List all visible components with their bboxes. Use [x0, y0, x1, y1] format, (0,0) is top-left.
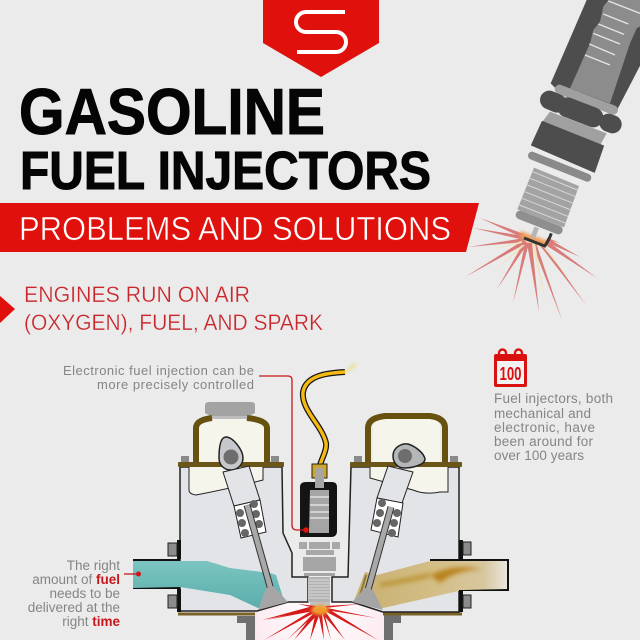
icon: spark plug with sparks — [465, 0, 640, 320]
callout line to spark plug — [259, 376, 309, 533]
right cylinder head — [332, 416, 508, 612]
icon: calendar 100: 100 — [500, 364, 522, 384]
callout: right fuel and time: delivered at the — [28, 600, 120, 615]
callout: 100 years: over 100 years — [494, 448, 584, 463]
logo shield — [263, 0, 379, 77]
heading arrow — [0, 296, 15, 323]
title — [19, 75, 431, 201]
callout: right fuel and time: right time — [62, 614, 120, 629]
callout: electronic control: more precisely controlled — [97, 377, 254, 392]
callout: right fuel and time — [28, 558, 120, 629]
title: FUEL INJECTORS — [20, 141, 431, 201]
callout: electronic control — [63, 363, 254, 392]
left cylinder head — [133, 402, 308, 612]
combustion spark rays — [262, 604, 378, 640]
section heading — [24, 282, 323, 335]
title: GASOLINE — [19, 75, 325, 148]
callout: 100 years: Fuel injectors, both — [494, 391, 613, 406]
section heading: ENGINES RUN ON AIR — [24, 282, 250, 307]
icon: calendar 100 — [494, 350, 527, 387]
callout: 100 years: mechanical and — [494, 406, 591, 421]
callout: right fuel and time: amount of fuel — [32, 572, 120, 587]
chamber and cylinder walls — [178, 602, 462, 640]
callout: right fuel and time: The right — [67, 558, 120, 573]
callout: electronic control: Electronic fuel injection can be — [63, 363, 254, 378]
callout: 100 years — [494, 391, 613, 463]
center spark plug and wire — [299, 364, 356, 607]
callout line to fuel — [124, 572, 141, 576]
callout: 100 years: been around for — [494, 434, 594, 449]
section heading: (OXYGEN), FUEL, AND SPARK — [24, 310, 323, 335]
callout: 100 years: electronic, have — [494, 420, 595, 435]
subtitle banner: PROBLEMS AND SOLUTIONS — [19, 210, 451, 247]
callout: right fuel and time: needs to be — [49, 586, 120, 601]
engine diagram — [133, 364, 508, 640]
